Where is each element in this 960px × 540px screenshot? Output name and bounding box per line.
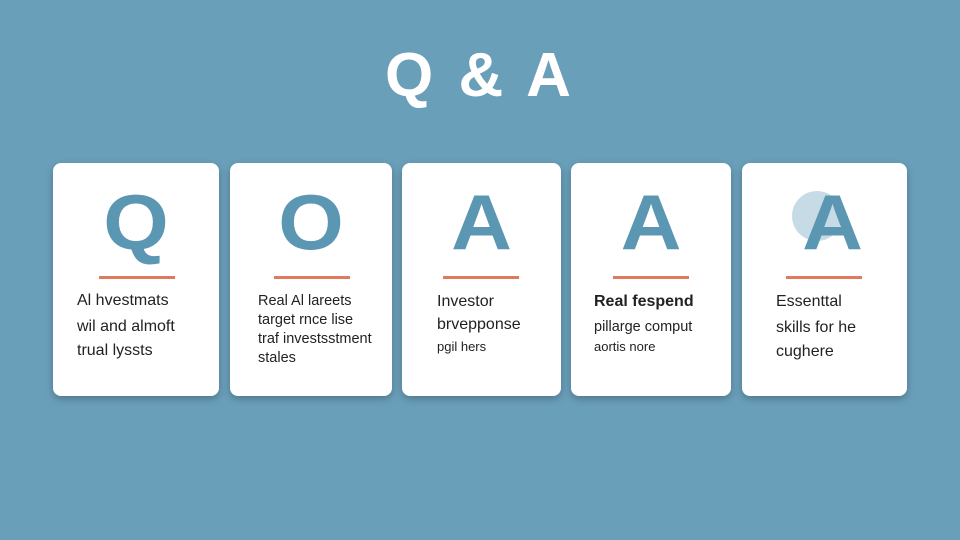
text: cughere — [776, 343, 834, 360]
text — [437, 293, 521, 354]
accent line — [274, 276, 350, 279]
text: pgil hers — [437, 339, 486, 354]
text — [776, 293, 856, 360]
text: Real fespend — [594, 293, 694, 310]
text: target rnce lise — [258, 312, 353, 328]
accent line — [613, 276, 689, 279]
icon: letter A: A — [451, 178, 512, 266]
text: Investor — [437, 293, 494, 310]
text: stales — [258, 350, 296, 366]
icon: circle with letter A: A — [802, 178, 863, 266]
text: trual lyssts — [77, 342, 153, 359]
card 5 — [742, 163, 907, 396]
text: skills for he — [776, 319, 856, 336]
title: Q & A — [385, 41, 575, 110]
text: traf investsstment — [258, 331, 372, 347]
accent line — [786, 276, 862, 279]
text: Essenttal — [776, 293, 842, 310]
text — [594, 293, 694, 354]
text: pillarge comput — [594, 319, 692, 335]
icon: letter A: A — [621, 178, 681, 266]
card 4 — [571, 163, 731, 396]
icon: letter O: O — [278, 178, 344, 266]
text — [258, 293, 372, 366]
text: wil and almoft — [77, 318, 175, 335]
accent line — [99, 276, 175, 279]
accent line — [443, 276, 519, 279]
text — [77, 292, 175, 359]
text: Real Al lareets — [258, 293, 352, 309]
text: aortis nore — [594, 339, 655, 354]
text: Al hvestmats — [77, 292, 169, 309]
card 2 — [230, 163, 392, 396]
card 1 — [53, 163, 219, 396]
text: brvepponse — [437, 316, 521, 333]
icon: letter Q: Q — [103, 178, 169, 266]
card 3 — [402, 163, 561, 396]
